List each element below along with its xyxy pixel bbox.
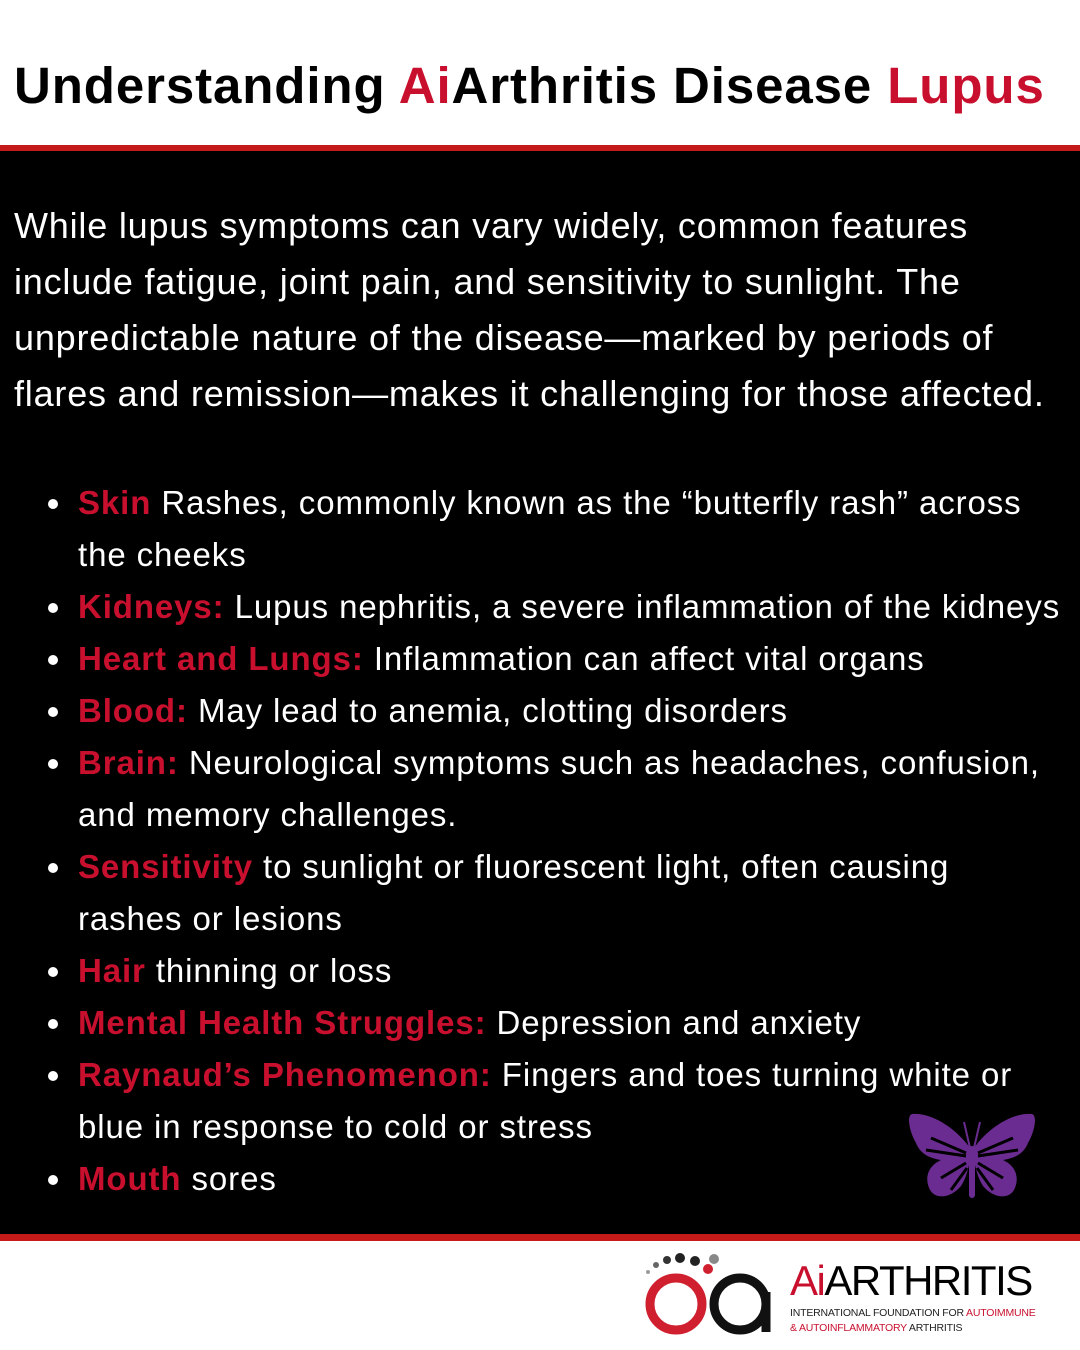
logo: AiArthritis bbox=[646, 1253, 1036, 1334]
intro paragraph: unpredictable nature of the disease—marked by periods of bbox=[14, 317, 993, 358]
intro paragraph: flares and remission—makes it challenging for those affected. bbox=[14, 373, 1045, 414]
symptom list: Hair thinning or loss bbox=[78, 952, 392, 989]
logo mark bbox=[646, 1253, 770, 1334]
logo tagline bbox=[790, 1307, 1036, 1334]
logo tagline: & AUTOINFLAMMATORY ARTHRITIS bbox=[790, 1322, 962, 1334]
symptom list: Mouth sores bbox=[78, 1160, 277, 1197]
symptom list: and memory challenges. bbox=[78, 796, 457, 833]
symptom list: rashes or lesions bbox=[78, 900, 343, 937]
logo wordmark: AiARTHRITIS bbox=[790, 1257, 1032, 1304]
intro paragraph: While lupus symptoms can vary widely, common features bbox=[14, 205, 968, 246]
symptom list: Skin Rashes, commonly known as the “butterfly rash” across bbox=[78, 484, 1022, 521]
intro paragraph bbox=[14, 205, 1045, 414]
logo tagline: INTERNATIONAL FOUNDATION FOR AUTOIMMUNE bbox=[790, 1307, 1036, 1319]
icon: purple butterfly bbox=[909, 1114, 1035, 1198]
title: Understanding AiArthritis Disease Lupus bbox=[14, 57, 1045, 114]
symptom list: Brain: Neurological symptoms such as headaches, confusion, bbox=[78, 744, 1040, 781]
intro paragraph: include fatigue, joint pain, and sensitivity to sunlight. The bbox=[14, 261, 961, 302]
symptom list: Heart and Lungs: Inflammation can affect vital organs bbox=[78, 640, 925, 677]
symptom list: Mental Health Struggles: Depression and anxiety bbox=[78, 1004, 861, 1041]
symptom list: Kidneys: Lupus nephritis, a severe inflammation of the kidneys bbox=[78, 588, 1060, 625]
symptom list: Sensitivity to sunlight or fluorescent light, often causing bbox=[78, 848, 949, 885]
symptom list: blue in response to cold or stress bbox=[78, 1108, 593, 1145]
symptom list bbox=[48, 484, 1060, 1197]
symptom list: Blood: May lead to anemia, clotting disorders bbox=[78, 692, 788, 729]
symptom list: the cheeks bbox=[78, 536, 247, 573]
symptom list: Raynaud’s Phenomenon: Fingers and toes turning white or bbox=[78, 1056, 1012, 1093]
